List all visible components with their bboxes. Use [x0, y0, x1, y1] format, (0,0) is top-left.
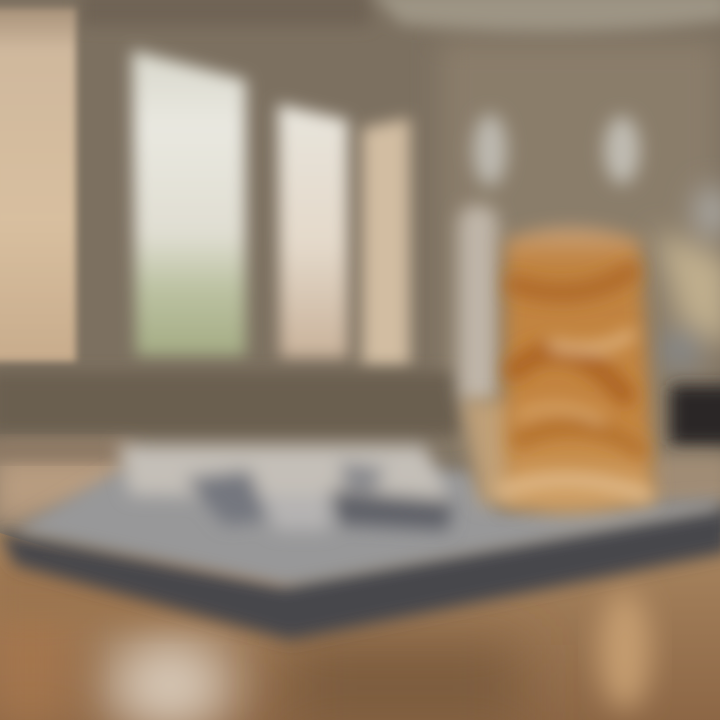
jar: amber contents: [505, 228, 655, 514]
ceiling: [80, 0, 720, 32]
window: centre pane: [278, 104, 348, 358]
counter surface: [0, 440, 720, 530]
window: right pane: [362, 118, 410, 366]
window sill: [0, 372, 460, 436]
jar: glass neck highlights: [458, 114, 640, 405]
right wall highlight: [655, 186, 720, 370]
jar: swirls: [505, 272, 645, 495]
jar: lower left pale glass: [462, 400, 520, 505]
window: left panel: [0, 8, 76, 362]
wooden foreground: [0, 530, 720, 720]
dark appliance at right: [670, 385, 720, 445]
grey mat: top surface: [14, 470, 720, 586]
grey mat: dark front edge: [0, 505, 720, 640]
window: centre-left pane with green view: [132, 50, 246, 356]
glass jar: [458, 114, 655, 514]
papers on mat: [118, 445, 452, 530]
